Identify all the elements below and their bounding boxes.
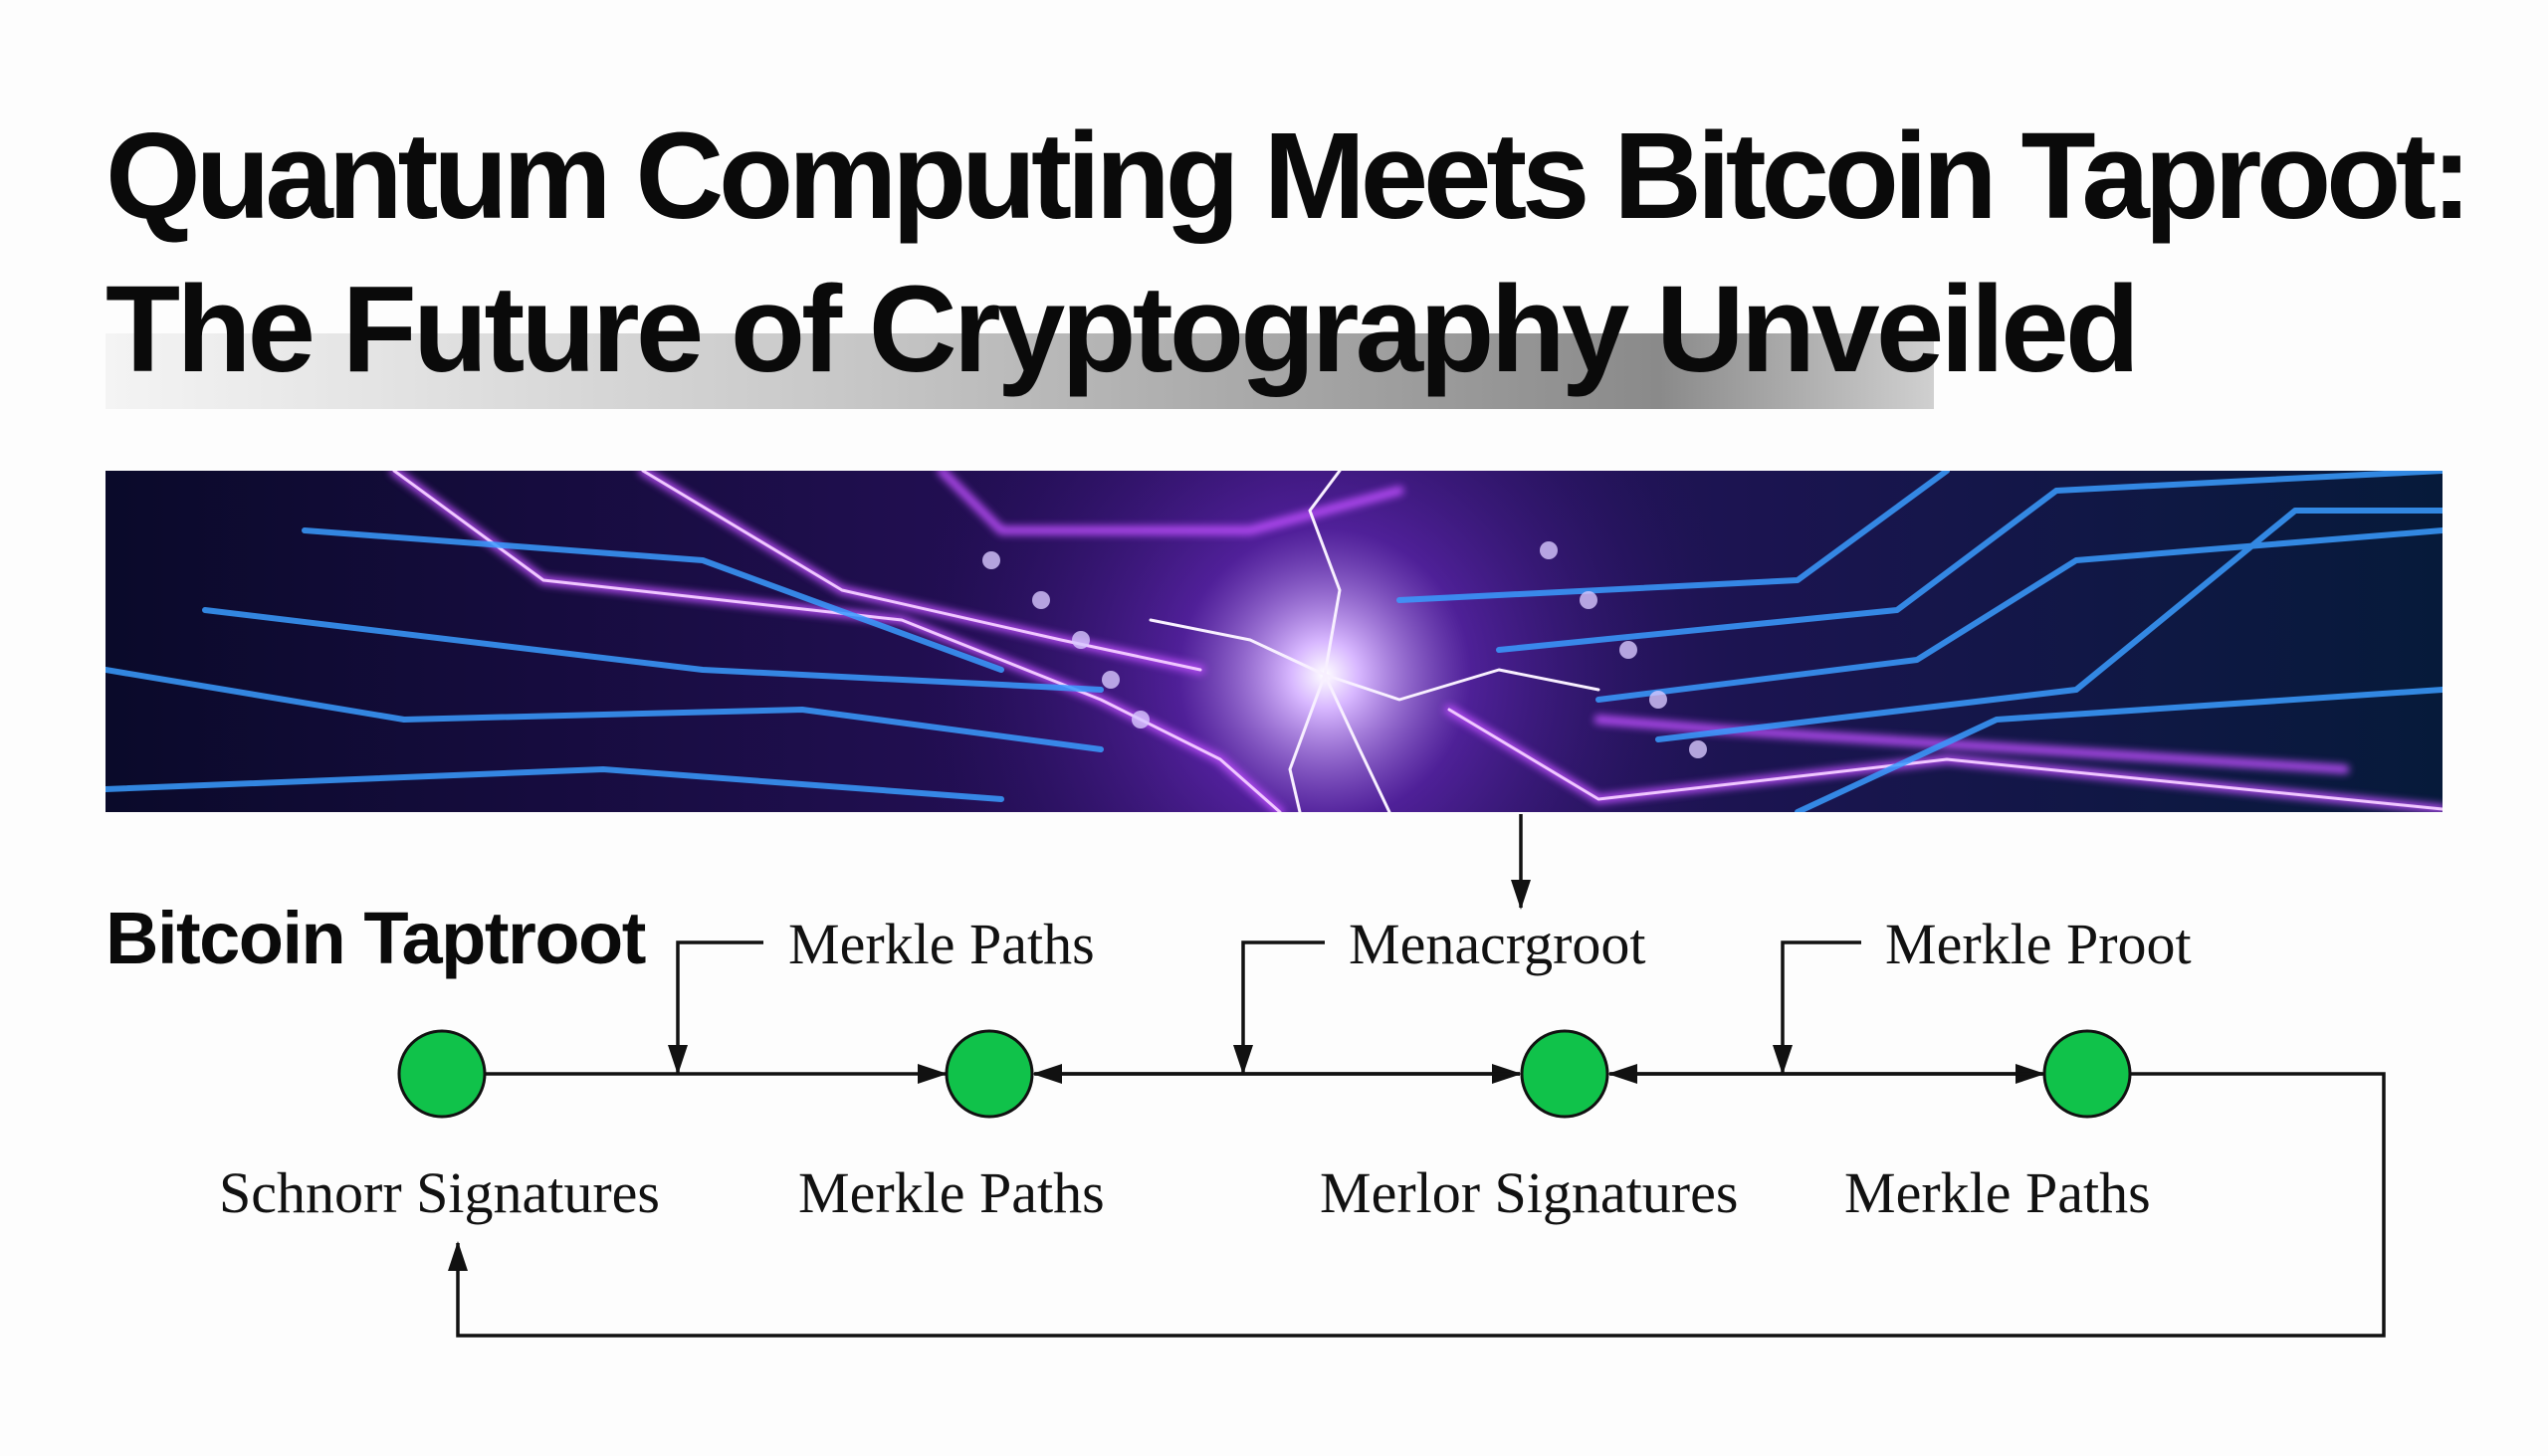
section heading: Bitcoin Taptroot: Bitcoin Taptroot xyxy=(106,897,645,979)
label: Merlor Signatures: Merlor Signatures xyxy=(1320,1160,1738,1225)
hero image: quantum circuit xyxy=(106,471,2442,812)
label: Merkle Paths: Merkle Paths xyxy=(798,1160,1105,1225)
title underline bar xyxy=(106,333,1934,409)
label: Menaccgroot: Menacrgroot xyxy=(1349,912,1646,976)
label: Schnorr Signatures: Schnorr Signatures xyxy=(219,1160,660,1225)
title line 1: Quantum Computing Meets Bitcoin Taproot: xyxy=(106,108,2467,245)
label: Merkle Proot: Merkle Proot xyxy=(1885,912,2192,976)
label: Merkle Paths (top): Merkle Paths xyxy=(788,912,1095,976)
title line 2: The Future of Cryptography Unveiled xyxy=(106,262,2136,398)
label: Merkle Paths (right): Merkle Paths xyxy=(1844,1160,2151,1225)
